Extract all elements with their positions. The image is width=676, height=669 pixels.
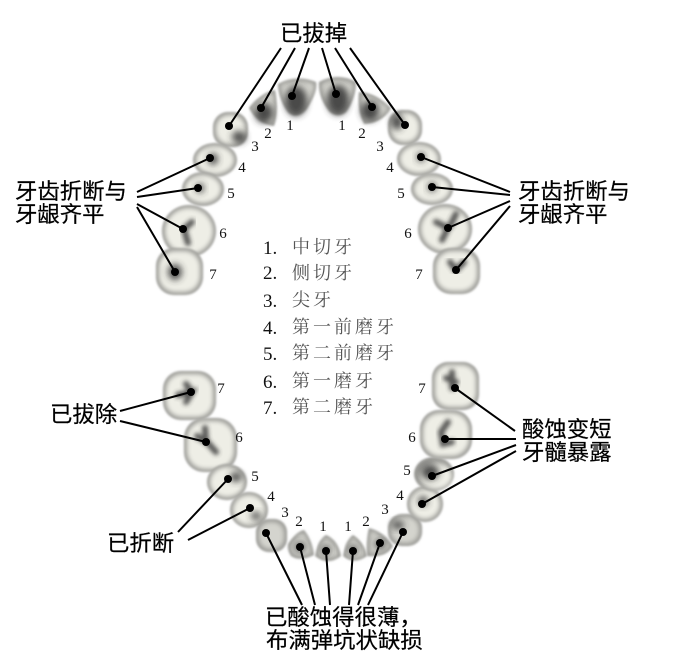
- tooth name legend: 5.: [263, 344, 277, 365]
- tooth: lower left 2: [288, 530, 314, 559]
- tooth name legend: 尖牙: [292, 290, 334, 310]
- tooth: upper left 2: [249, 90, 277, 126]
- tooth position numbers: 6: [235, 430, 243, 446]
- tooth: upper right 6: [418, 204, 472, 254]
- tooth: upper right 4: [397, 142, 441, 176]
- tooth: upper right 2: [359, 92, 391, 124]
- tooth name legend: 7.: [263, 398, 277, 419]
- tooth position numbers: 2: [362, 514, 370, 530]
- tooth name legend: 4.: [263, 318, 277, 339]
- tooth position numbers: 6: [404, 226, 412, 242]
- tooth position numbers: 4: [267, 489, 275, 505]
- tooth name legend: 第一磨牙: [292, 371, 376, 391]
- tooth name legend: [263, 237, 397, 419]
- tooth: lower right 2: [367, 528, 393, 556]
- tooth: upper right 3: [388, 110, 422, 145]
- tooth name legend: 1.: [263, 238, 277, 259]
- tooth: lower right 4: [407, 486, 443, 522]
- label: acid erosion, lower right: 酸蚀变短: [522, 417, 612, 442]
- tooth name legend: 6.: [263, 372, 277, 393]
- tooth name legend: 第二前磨牙: [292, 343, 397, 363]
- tooth: upper left 3: [213, 112, 248, 147]
- tooth position numbers: 3: [376, 139, 384, 155]
- tooth: lower right 7: [432, 362, 479, 410]
- tooth: lower left 6: [184, 418, 237, 472]
- label: right upper fractured: 牙龈齐平: [518, 202, 608, 227]
- tooth position numbers: 3: [251, 139, 259, 155]
- tooth name legend: 2.: [263, 263, 277, 284]
- tooth position numbers: 4: [396, 488, 404, 504]
- label: left upper fractured: 牙龈齐平: [15, 202, 105, 227]
- tooth position numbers: 1: [286, 118, 294, 134]
- tooth: upper left 5: [182, 172, 224, 206]
- tooth: upper right 7: [433, 248, 480, 294]
- label: right upper fractured: 牙齿折断与: [518, 179, 630, 204]
- tooth position numbers: 1: [338, 118, 346, 134]
- tooth: lower right 1: [343, 535, 367, 560]
- tooth position numbers: 7: [415, 267, 423, 283]
- tooth name legend: 3.: [263, 291, 277, 312]
- tooth position numbers: 1: [344, 519, 352, 535]
- label: acid erosion, lower right: [522, 417, 612, 465]
- tooth name legend: 第二磨牙: [292, 397, 376, 417]
- label: bottom erosion: 布满弹坑状缺损: [266, 628, 423, 653]
- tooth position numbers: 6: [219, 226, 227, 242]
- tooth: upper left 4: [193, 143, 237, 177]
- tooth position numbers: 2: [264, 126, 272, 142]
- label: left upper fractured: 牙齿折断与: [15, 179, 127, 204]
- tooth name legend: 第一前磨牙: [292, 317, 397, 337]
- tooth: upper right 1: [319, 77, 356, 115]
- tooth position numbers: 3: [281, 505, 289, 521]
- label: acid erosion, lower right: 牙髓暴露: [522, 440, 612, 465]
- lower arch teeth: [163, 362, 479, 561]
- tooth position numbers: [209, 118, 426, 535]
- label: broken, lower left: 已折断: [107, 531, 174, 556]
- tooth position numbers: 6: [408, 430, 416, 446]
- tooth: lower left 5: [207, 464, 247, 500]
- label: right upper fractured: [518, 179, 630, 227]
- tooth position numbers: 2: [295, 514, 303, 530]
- tooth: lower left 7: [163, 371, 216, 420]
- tooth position numbers: 5: [397, 186, 405, 202]
- tooth position numbers: 5: [227, 186, 235, 202]
- label: bottom erosion: [265, 605, 423, 653]
- tooth: lower right 3: [388, 514, 422, 546]
- tooth: lower right 6: [420, 410, 472, 459]
- tooth position numbers: 7: [217, 381, 225, 397]
- tooth position numbers: 5: [251, 469, 259, 485]
- tooth position numbers: 3: [381, 502, 389, 518]
- label: bottom erosion: 已酸蚀得很薄，: [265, 605, 422, 630]
- tooth position numbers: 1: [319, 519, 327, 535]
- label: left upper fractured: [15, 179, 127, 227]
- tooth position numbers: 4: [238, 160, 246, 176]
- tooth position numbers: 2: [358, 126, 366, 142]
- tooth name legend: 中切牙: [292, 237, 355, 257]
- tooth: lower right 5: [414, 457, 454, 491]
- tooth: upper left 6: [162, 205, 216, 257]
- tooth: upper left 1: [278, 78, 316, 116]
- tooth: upper left 7: [156, 248, 203, 295]
- tooth: lower left 4: [230, 492, 268, 528]
- upper arch teeth: [156, 77, 480, 295]
- tooth name legend: 侧切牙: [292, 263, 355, 283]
- tooth: lower left 1: [315, 535, 341, 561]
- tooth position numbers: 7: [209, 267, 217, 283]
- tooth: upper right 5: [411, 173, 453, 205]
- tooth position numbers: 7: [418, 381, 426, 397]
- tooth: lower left 3: [256, 519, 287, 552]
- tooth position numbers: 5: [403, 463, 411, 479]
- tooth position numbers: 4: [386, 160, 394, 176]
- label: extracted, top: 已拔掉: [280, 21, 347, 46]
- leader lines: [120, 48, 516, 605]
- label: extracted, lower left: 已拔除: [50, 402, 117, 427]
